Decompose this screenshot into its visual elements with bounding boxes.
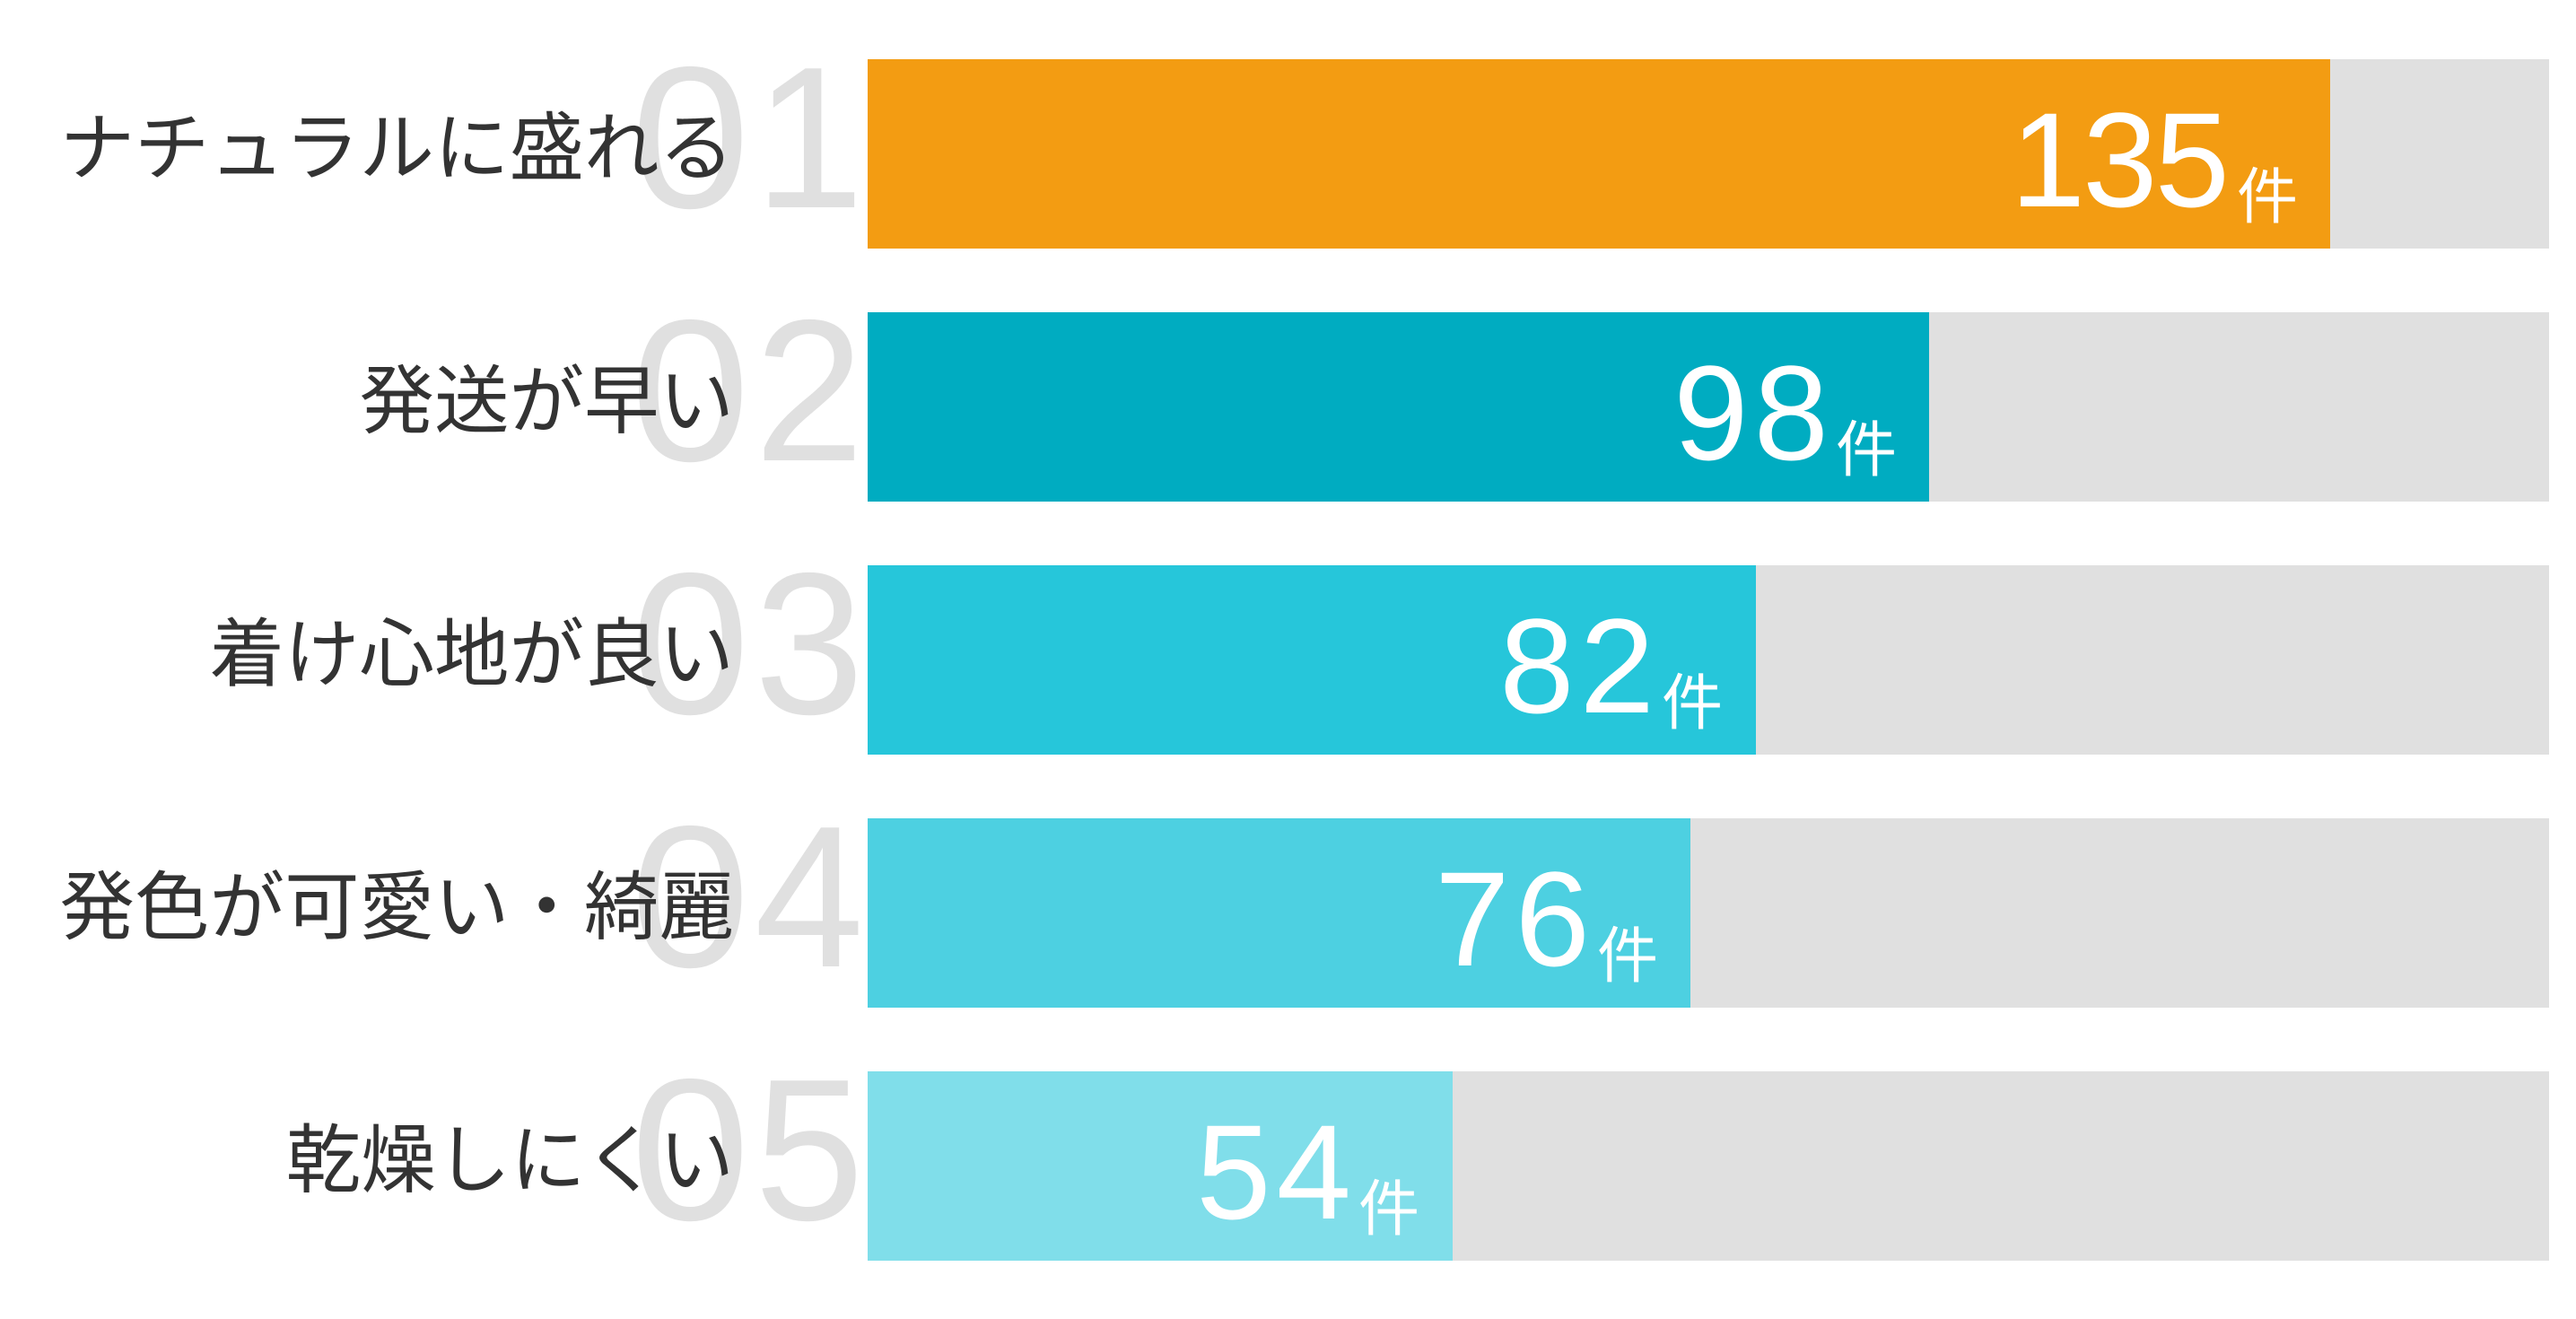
label: 乾燥しにくい: 乾燥しにくい <box>286 1100 734 1209</box>
bar track <box>868 59 2549 249</box>
value 135件: 135 <box>2011 84 2227 235</box>
rank number 04: 4 <box>755 783 869 1009</box>
bar fill 98 <box>868 312 1929 502</box>
value 98件: 98 <box>1673 337 1834 488</box>
bar track <box>868 565 2549 755</box>
bar track <box>868 1071 2549 1261</box>
row 2: 発送が早い <box>359 277 2549 503</box>
bar fill 54 <box>868 1071 1453 1261</box>
value 82件: 件 <box>1662 653 1723 742</box>
rank number 04: 0 <box>631 783 755 1009</box>
row 5: 乾燥しにくい <box>286 1036 2549 1262</box>
bar fill 76 <box>868 818 1690 1008</box>
value 76件: 76 <box>1435 843 1595 994</box>
value 98件: 件 <box>1836 400 1897 489</box>
value 82件: 82 <box>1499 590 1660 741</box>
bar track <box>868 312 2549 502</box>
rank number 02: 0 <box>631 277 755 503</box>
rank number 04 <box>631 783 869 1009</box>
rank number 03 <box>631 530 869 756</box>
row 3: 着け心地が良い <box>210 530 2549 756</box>
label: 着け心地が良い: 着け心地が良い <box>210 594 734 703</box>
value 135件: 件 <box>2237 147 2298 236</box>
rank number 02: 2 <box>755 277 869 503</box>
rank number 01: 0 <box>631 24 755 250</box>
bar fill 82 <box>868 565 1756 755</box>
bar fill 135 <box>868 59 2330 249</box>
rank number 01 <box>631 24 869 250</box>
label: ナチュラルに盛れる: ナチュラルに盛れる <box>59 88 734 197</box>
rank number 05 <box>631 1036 869 1262</box>
row 1: ナチュラルに盛れる <box>59 24 2549 250</box>
label: 発色が可愛い・綺麗: 発色が可愛い・綺麗 <box>59 847 734 956</box>
rank number 01: 1 <box>755 24 869 250</box>
rank number 05: 5 <box>755 1036 869 1262</box>
rank number 05: 0 <box>631 1036 755 1262</box>
bar track <box>868 818 2549 1008</box>
value 54件: 54 <box>1196 1096 1357 1247</box>
label: 発送が早い: 発送が早い <box>359 341 734 450</box>
value 76件: 件 <box>1597 906 1658 995</box>
value 54件: 件 <box>1358 1159 1419 1248</box>
rank number 02 <box>631 277 869 503</box>
rank number 03: 3 <box>755 530 869 756</box>
rank number 03: 0 <box>631 530 755 756</box>
row 4: 発色が可愛い・綺麗 <box>59 783 2549 1009</box>
